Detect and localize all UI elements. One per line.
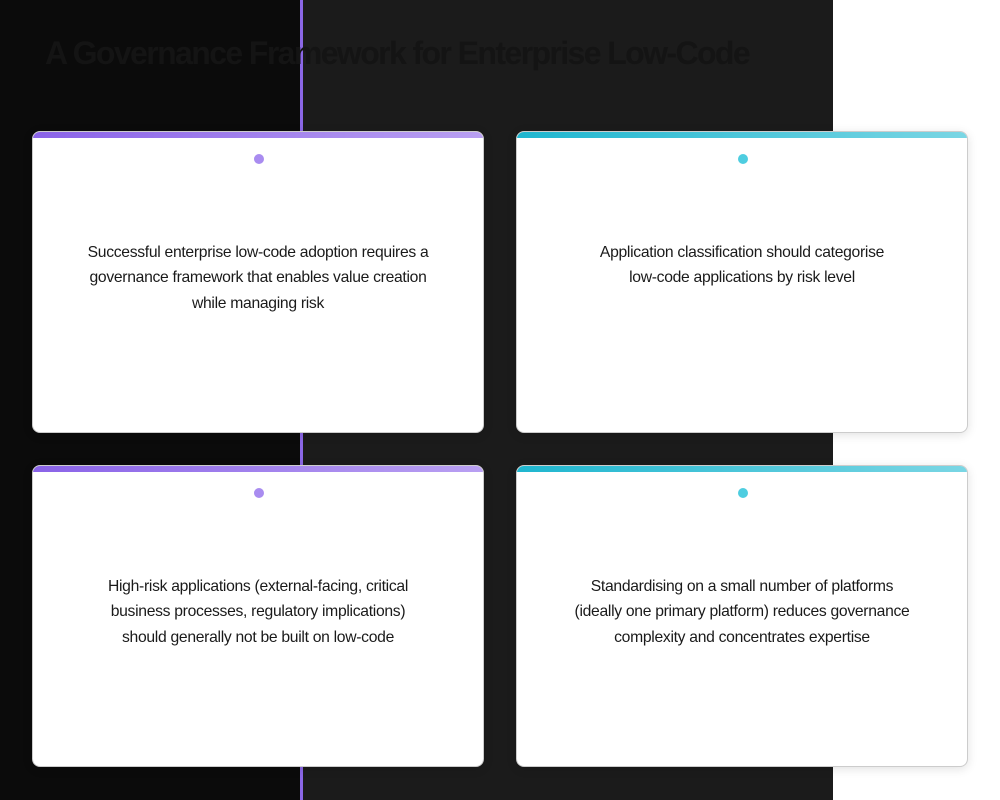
dot icon — [738, 154, 748, 164]
panel: card 3 — [32, 465, 484, 767]
text: Application classification should categorise — [600, 244, 884, 260]
text: Successful enterprise low-code adoption requires a — [88, 244, 428, 261]
text: complexity and concentrates expertise — [614, 629, 870, 646]
panel: card 1 — [32, 131, 484, 433]
text — [575, 578, 909, 646]
text: while managing risk — [192, 295, 324, 312]
text — [108, 578, 408, 646]
text: (ideally one primary platform) reduces governance — [575, 603, 909, 620]
panel: card 4 — [516, 465, 968, 767]
title: A Governance Framework for Enterprise Low-Code — [45, 35, 749, 71]
text — [88, 244, 429, 312]
text: should generally not be built on low-code — [122, 629, 394, 646]
dot icon — [738, 488, 748, 498]
panel: card 2 — [516, 131, 968, 433]
dot icon — [254, 488, 264, 498]
text: Standardising on a small number of platforms — [591, 578, 893, 595]
text: low-code applications by risk level — [629, 269, 855, 286]
dot icon — [254, 154, 264, 164]
text: governance framework that enables value creation — [89, 269, 427, 286]
text: High-risk applications (external-facing, critical — [108, 578, 408, 595]
text — [600, 244, 884, 286]
text: business processes, regulatory implications) — [111, 603, 405, 620]
